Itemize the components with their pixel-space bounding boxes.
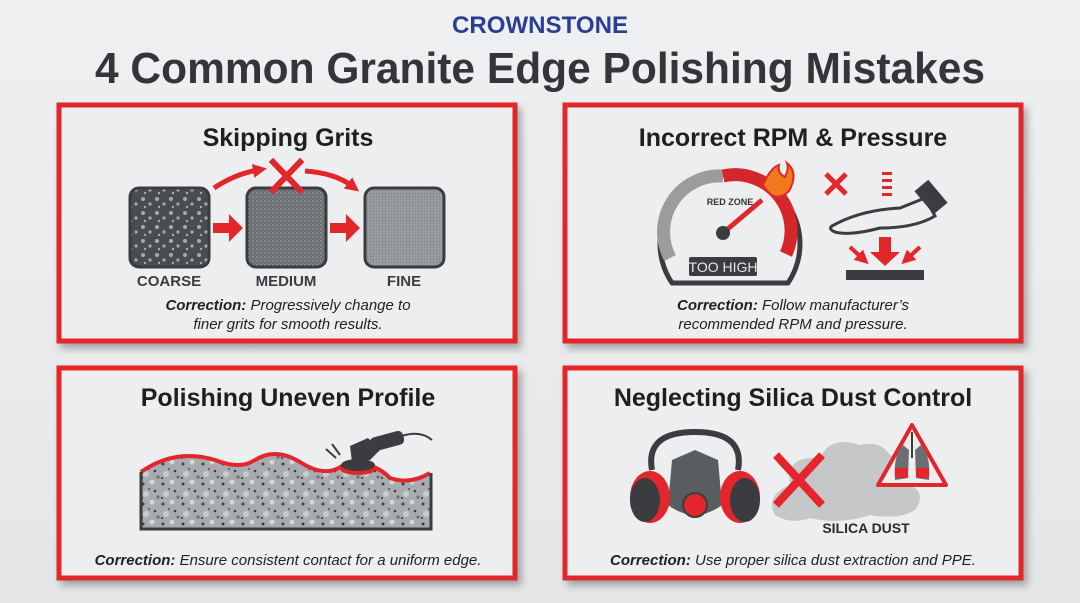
granite profile <box>141 454 431 529</box>
correction text: Correction: Follow manufacturer’s <box>677 297 909 314</box>
icon: gauge: TOO HIGH <box>689 259 757 275</box>
arrows between grits <box>213 170 360 242</box>
icon: lungs warning <box>878 425 946 485</box>
label: silica dust: SILICA DUST <box>822 520 910 536</box>
correction text: Correction: Use proper silica dust extraction and PPE. <box>610 552 976 569</box>
grit labels: COARSE <box>137 273 201 290</box>
brand name: CROWNSTONE <box>452 12 628 39</box>
grit labels <box>137 273 421 290</box>
correction text: recommended RPM and pressure. <box>678 316 908 333</box>
icon: polisher <box>326 430 432 475</box>
panel: skipping grits <box>59 105 515 341</box>
icon: red x skip <box>273 162 300 190</box>
correction text: finer grits for smooth results. <box>193 316 383 333</box>
correction text: Correction: Progressively change to <box>165 297 411 314</box>
heading: rpm: Incorrect RPM & Pressure <box>639 124 947 152</box>
title: 4 Common Granite Edge Polishing Mistakes <box>95 44 985 93</box>
heading: uneven profile: Polishing Uneven Profile <box>141 384 435 412</box>
icon: dust cloud <box>772 442 920 521</box>
grit labels: FINE <box>387 273 421 290</box>
icon: gauge <box>660 163 800 283</box>
correction text: Correction: Ensure consistent contact for a uniform edge. <box>95 552 481 569</box>
heading: skipping grits: Skipping Grits <box>203 124 373 152</box>
icon: respirator <box>630 432 760 523</box>
grit labels: MEDIUM <box>256 273 316 290</box>
grit squares <box>130 188 444 267</box>
panel: incorrect rpm <box>565 105 1021 341</box>
icon: gauge: RED ZONE <box>707 197 753 207</box>
icon: hand pressure <box>826 172 948 280</box>
panel: uneven profile <box>59 368 515 578</box>
panel: silica dust <box>565 368 1021 578</box>
heading: silica: Neglecting Silica Dust Control <box>614 384 972 412</box>
